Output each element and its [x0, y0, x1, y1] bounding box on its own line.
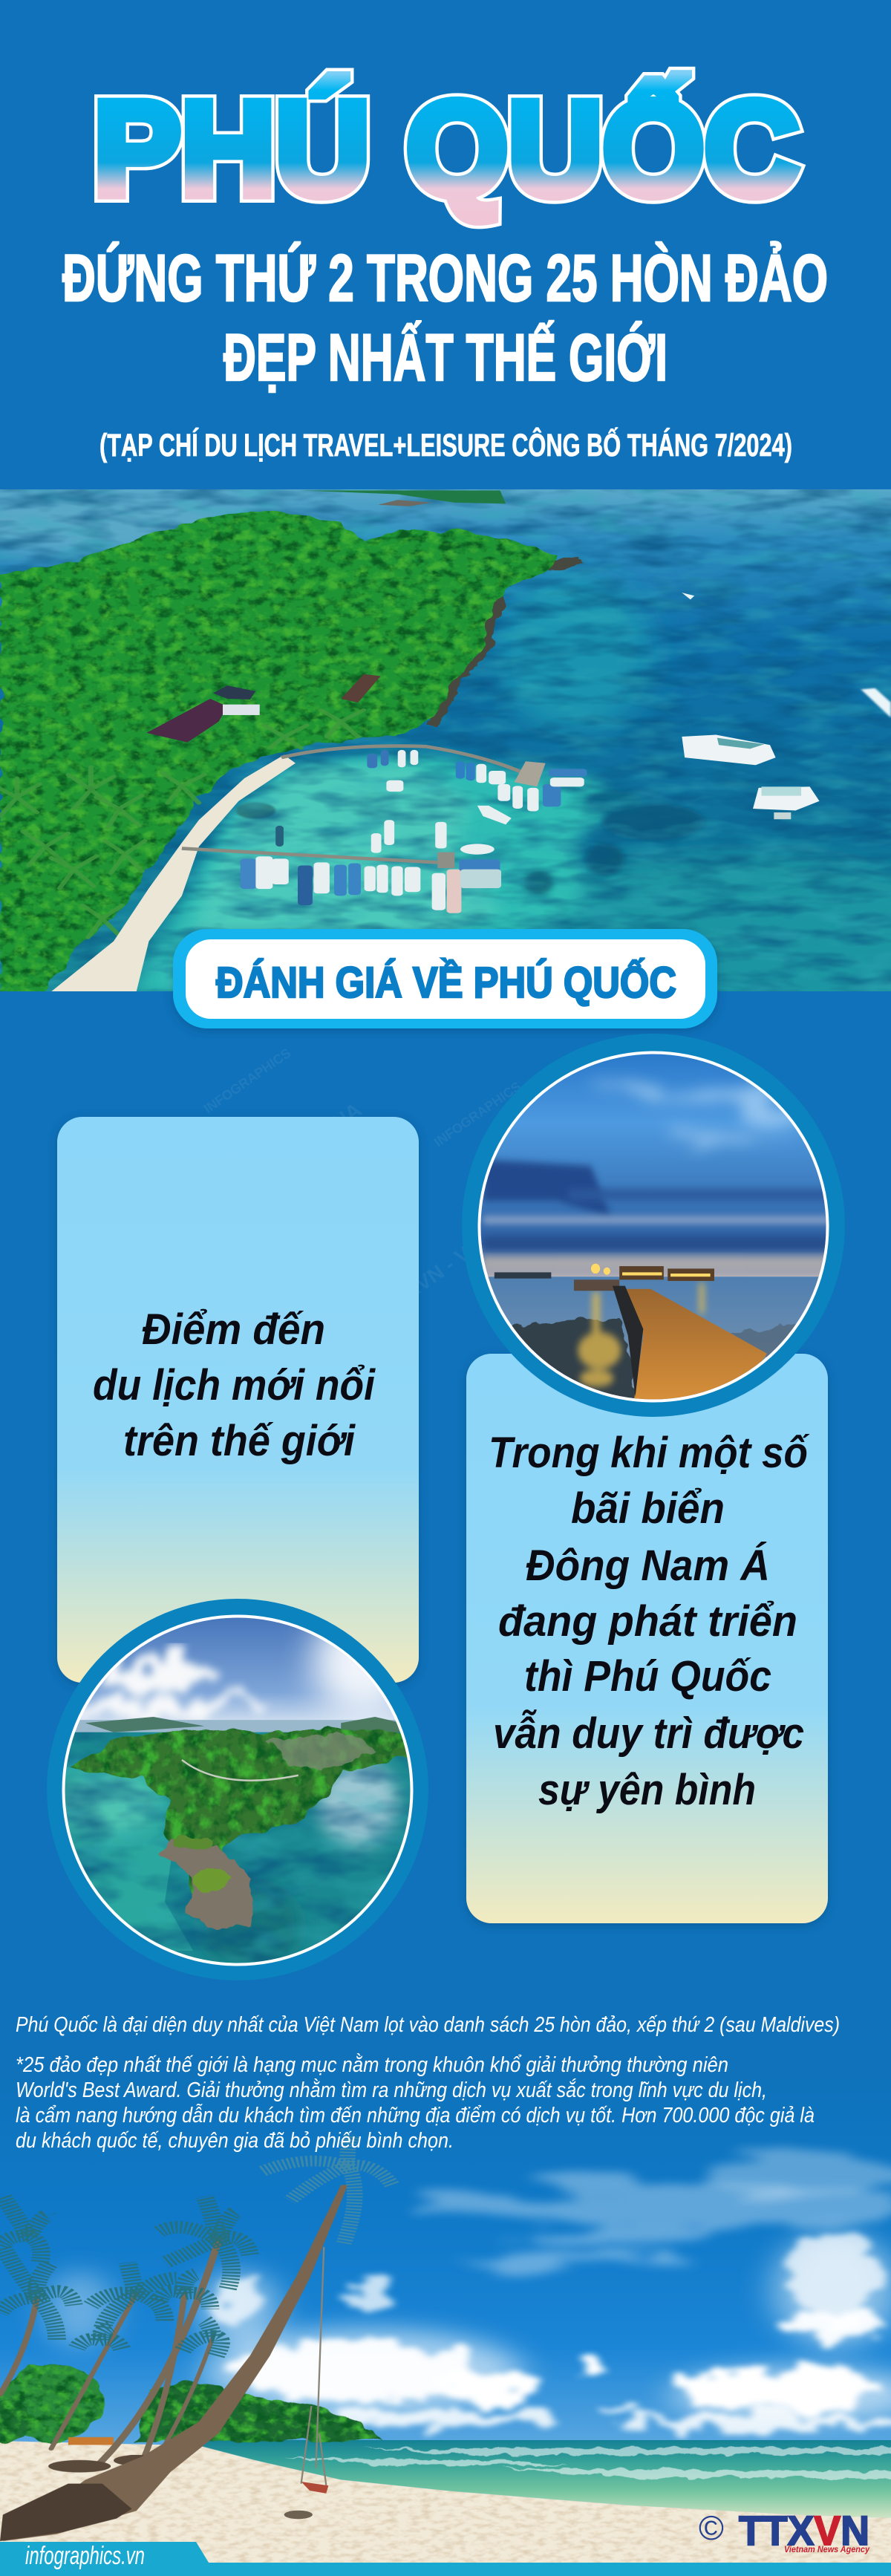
- title: Phú Quốc: PHÚ QUỐC: [94, 74, 799, 224]
- card text: peaceful Phú Quốc: sự yên bình: [538, 1766, 756, 1814]
- rocky shoreline: [432, 561, 582, 725]
- note: about the award: World's Best Award. Giải thưởng nhằm tìm ra những dịch vụ xuất sắc trong lĩnh vực du lịch,: [16, 2078, 767, 2102]
- boat wakes: [682, 593, 891, 718]
- watermarks: TTXVN - VNA: [576, 1039, 696, 1132]
- photo: aerial view of island and bay: [0, 489, 891, 1021]
- logo: TTXVN: TTXVN: [739, 2507, 869, 2554]
- panel: right card: [466, 1354, 828, 1923]
- footer bar: infographics.vn: [25, 2542, 145, 2570]
- hill: [137, 2381, 385, 2441]
- subtitle heading: ĐẸP NHẤT THẾ GIỚI: [223, 320, 668, 394]
- sand: [0, 2441, 891, 2576]
- card text: emerging destination: du lịch mới nổi: [93, 1361, 376, 1409]
- logo: TTXVN: ©: [699, 2508, 724, 2547]
- card text: peaceful Phú Quốc: vẫn duy trì được: [493, 1709, 804, 1758]
- card text: emerging destination: [93, 1305, 376, 1465]
- card text: peaceful Phú Quốc: Đông Nam Á: [526, 1542, 770, 1590]
- sea: [199, 2440, 891, 2518]
- moored boats: [241, 750, 587, 913]
- forest: [0, 511, 560, 991]
- watermarks: INFOGRAPHICS: [431, 1079, 523, 1150]
- clouds: [409, 2146, 891, 2263]
- bushes: [0, 2364, 102, 2445]
- panel: left card: [57, 1117, 419, 1683]
- note: about the award: [16, 2052, 815, 2153]
- card text: peaceful Phú Quốc: thì Phú Quốc: [524, 1652, 771, 1701]
- main palm: [0, 2135, 392, 2541]
- watermarks: TTXVN - VNA: [379, 1225, 499, 1318]
- note: about the award: du khách quốc tế, chuyên gia đã bỏ phiếu bình chọn.: [16, 2129, 454, 2153]
- card text: emerging destination: Điểm đến: [142, 1305, 325, 1354]
- card text: peaceful Phú Quốc: đang phát triển: [498, 1597, 797, 1646]
- buildings: [146, 674, 381, 743]
- note: about the award: *25 đảo đẹp nhất thế giới là hạng mục nằm trong khuôn khổ giải thưởng thường niên: [16, 2052, 728, 2077]
- footer bar: [0, 2542, 891, 2576]
- watermarks: TTXVN - VNA: [246, 1098, 365, 1192]
- watermarks: [201, 1039, 696, 1318]
- card text: peaceful Phú Quốc: bãi biển: [571, 1484, 725, 1533]
- watermarks: INFOGRAPHICS: [201, 1046, 293, 1116]
- card text: peaceful Phú Quốc: Trong khi một số: [489, 1429, 810, 1477]
- section heading pill: [173, 929, 717, 1028]
- subtitle heading: [62, 241, 828, 394]
- palm crowns on shore: [0, 710, 364, 937]
- photo circle: pier at dusk: [462, 1034, 845, 1418]
- card text: peaceful Phú Quốc: [489, 1429, 810, 1814]
- large tour boats: [682, 734, 820, 819]
- sand beach: [51, 755, 296, 991]
- photo circle: aerial of island coast: [45, 1599, 432, 1991]
- section heading pill: ĐÁNH GIÁ VỀ PHÚ QUỐC: [216, 959, 676, 1007]
- photo: beach with palm trees: [0, 2132, 891, 2563]
- title: Phú Quốc: PHÚ QUỐC: [94, 74, 799, 224]
- card text: emerging destination: trên thế giới: [123, 1417, 356, 1465]
- logo: TTXVN: Vietnam News Agency: [784, 2544, 870, 2554]
- palm fronds: [0, 2197, 250, 2355]
- piers: [182, 746, 523, 862]
- palm trunks: [0, 2240, 219, 2466]
- rope swing: [301, 2247, 328, 2494]
- distant islet: [301, 490, 506, 506]
